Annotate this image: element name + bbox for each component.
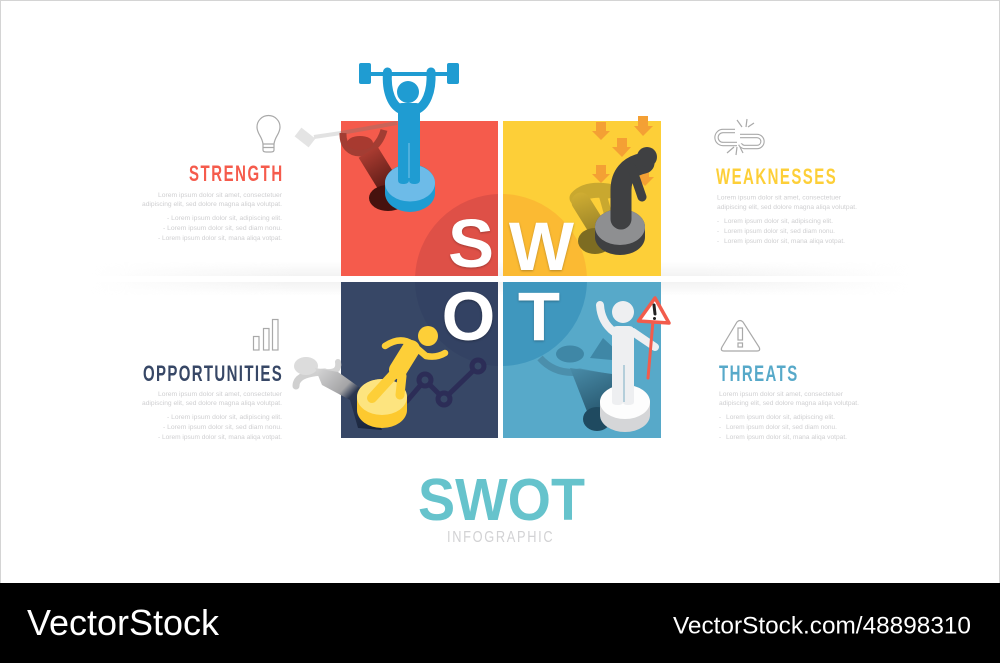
icon: bent figure on dark pedestal (595, 147, 657, 255)
text block: threats (719, 361, 859, 441)
heading: strength: STRENGTH (189, 161, 282, 186)
icon: weightlifter shadow (298, 123, 407, 211)
icon: runner on yellow pedestal (357, 326, 445, 428)
weaknesses body text: Lorem ipsum dolor sit, sed diam nonu. (724, 228, 835, 235)
icon: bent figure shadow (577, 190, 612, 254)
strength body text: - Lorem ipsum dolor sit, sed diam nonu. (163, 225, 282, 232)
letter O: O (442, 278, 495, 355)
strength body text: - Lorem ipsum dolor sit, mana aliqa votpat. (158, 235, 282, 242)
threats body text: Lorem ipsum dolor sit, mana aliqa votpat. (726, 434, 847, 441)
weaknesses body text: - (717, 228, 719, 235)
threats body text: adipiscing elit, sed dolore magna aliqa volutpat. (719, 400, 859, 407)
footer brand: VectorStock (27, 602, 220, 643)
icon: light bulb (257, 116, 280, 152)
heading: opportunities: OPPORTUNITIES (143, 361, 282, 386)
icon: runner shadow (294, 357, 382, 430)
strength body text: Lorem ipsum dolor sit amet, consectetuer (158, 192, 283, 199)
title: SWOT (418, 467, 585, 533)
letter W: W (509, 208, 575, 285)
horizontal soft shadow band (220, 271, 780, 288)
threats body text: - (719, 414, 721, 421)
strength body text: adipiscing elit, sed dolore magna aliqa volutpat. (142, 201, 282, 208)
weaknesses body text (717, 194, 857, 245)
icon: orange falling arrows (592, 116, 654, 186)
heading: weaknesses: WEAKNESSES (716, 164, 836, 189)
opportunities body text: - Lorem ipsum dolor sit, adipiscing elit. (167, 414, 282, 421)
heading: threats: THREATS (719, 361, 797, 386)
opportunities body text (142, 391, 283, 441)
strength body text (142, 192, 283, 242)
icon: bar chart (254, 320, 278, 350)
letter S: S (448, 205, 494, 282)
text block: strength (142, 161, 283, 242)
icon: threat figure shadow (540, 338, 616, 431)
icon: trend line (407, 360, 484, 405)
watermark footer band (0, 583, 1000, 663)
panel: threats square (503, 282, 661, 438)
threats body text (719, 391, 859, 441)
opportunities body text: - Lorem ipsum dolor sit, sed diam nonu. (163, 424, 282, 431)
weaknesses body text: Lorem ipsum dolor sit, adipiscing elit. (724, 218, 833, 225)
opportunities body text: - Lorem ipsum dolor sit, mana aliqa votpat. (158, 434, 282, 441)
subtitle: INFOGRAPHIC (447, 529, 553, 546)
icon: weightlifter on blue pedestal (359, 63, 459, 212)
threats body text: - (719, 434, 721, 441)
weaknesses body text: - (717, 238, 719, 245)
threats body text: Lorem ipsum dolor sit, adipiscing elit. (726, 414, 835, 421)
weaknesses body text: adipiscing elit, sed dolore magna aliqa volutpat. (717, 204, 857, 211)
opportunities body text: adipiscing elit, sed dolore magna aliqa volutpat. (142, 400, 282, 407)
icon: threat figure with warning sign (600, 298, 669, 432)
text block: opportunities (142, 361, 283, 441)
weaknesses body text: Lorem ipsum dolor sit, mana aliqa votpat. (724, 238, 845, 245)
icon: broken chain (716, 119, 762, 155)
threats body text: Lorem ipsum dolor sit amet, consectetuer (719, 391, 844, 398)
panel: opportunities square (341, 282, 498, 438)
text block: weaknesses (716, 164, 857, 245)
weaknesses body text: - (717, 218, 719, 225)
weaknesses body text: Lorem ipsum dolor sit amet, consectetuer (717, 194, 842, 202)
threats body text: - (719, 424, 721, 431)
icon: warning triangle (721, 320, 760, 351)
threats body text: Lorem ipsum dolor sit, sed diam nonu. (726, 424, 837, 431)
strength body text: - Lorem ipsum dolor sit, adipiscing elit. (167, 215, 282, 222)
footer url: VectorStock.com/48898310 (673, 612, 971, 640)
letter T: T (518, 278, 560, 355)
opportunities body text: Lorem ipsum dolor sit amet, consectetuer (158, 391, 283, 398)
panel: strength square (341, 121, 498, 276)
panel: weaknesses square (503, 121, 661, 276)
